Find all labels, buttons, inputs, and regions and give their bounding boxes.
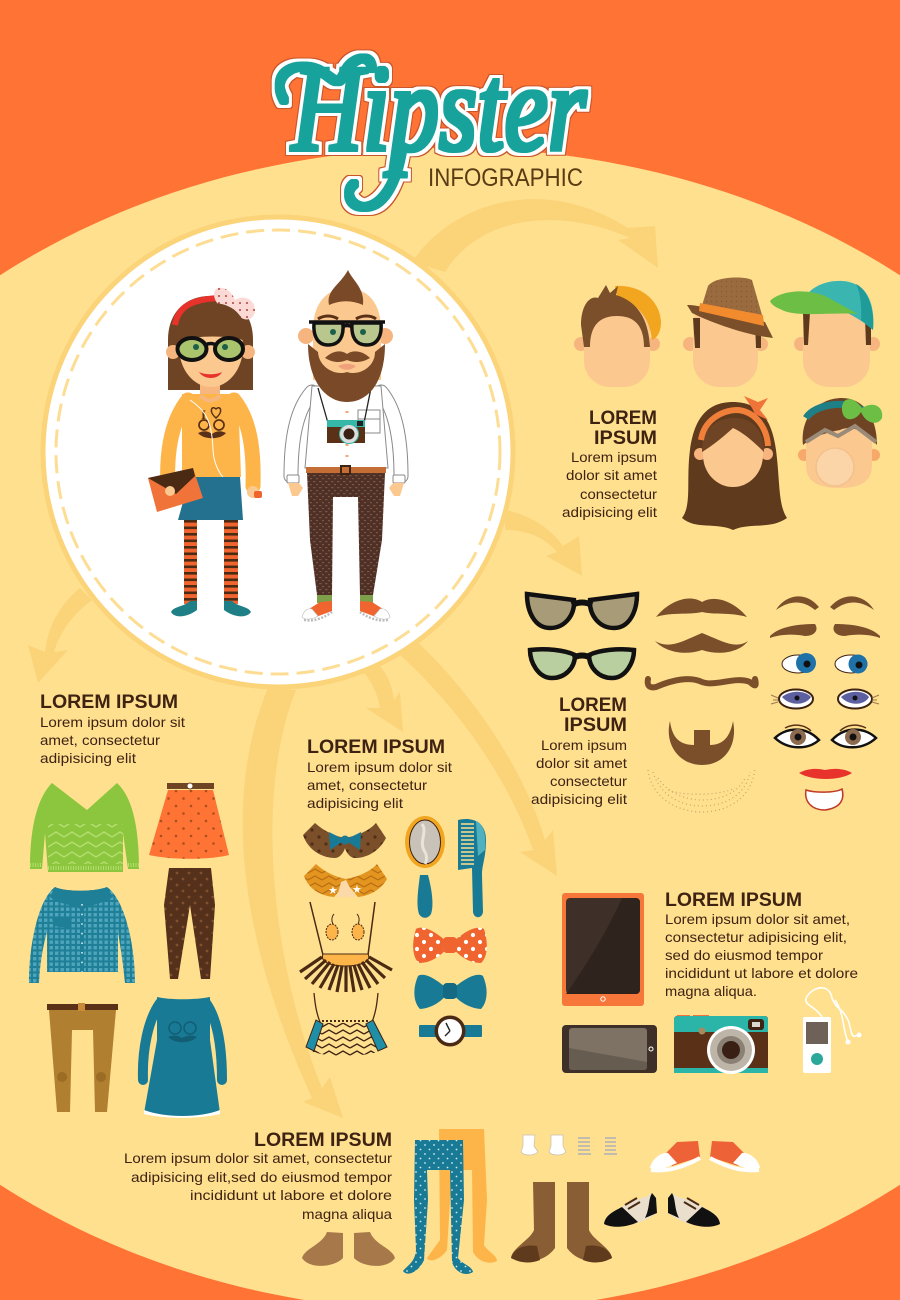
text: accessories: amet, consectetur bbox=[307, 777, 427, 793]
head: fedora hat bbox=[683, 278, 773, 387]
lips bbox=[799, 769, 852, 779]
text: footwear: LOREM IPSUM bbox=[254, 1130, 392, 1151]
teal dress bbox=[143, 997, 222, 1118]
orange skirt bbox=[149, 783, 229, 859]
teal tights bbox=[403, 1140, 473, 1274]
fringe necklace and earrings bbox=[300, 902, 392, 992]
ankle boots bbox=[302, 1232, 395, 1266]
text: facial features: consectetur bbox=[550, 773, 627, 789]
text: facial features: dolor sit amet bbox=[536, 755, 627, 771]
head: bubble gum girl bbox=[798, 398, 882, 488]
text: accessories: LOREM IPSUM bbox=[307, 737, 445, 758]
text: facial features: Lorem ipsum bbox=[541, 737, 627, 753]
title bbox=[280, 40, 587, 207]
text: gadgets: incididunt ut labore et dolore bbox=[665, 965, 858, 981]
text: accessories bbox=[307, 737, 452, 811]
mustache set bbox=[648, 598, 756, 687]
text: facial features bbox=[531, 695, 627, 807]
orange collar: ★ bbox=[328, 884, 338, 897]
text: heads: consectetur bbox=[580, 486, 657, 502]
comb bbox=[458, 819, 486, 917]
panel: clothing bbox=[29, 692, 229, 1118]
arrow: to heads bbox=[412, 199, 658, 272]
glasses: green lenses bbox=[530, 649, 634, 678]
beard bbox=[669, 721, 734, 765]
text: heads: LOREM bbox=[589, 408, 657, 429]
text: gadgets: sed do eiusmod tempor bbox=[665, 947, 823, 963]
panel: facial features bbox=[527, 594, 880, 812]
white socks bbox=[521, 1135, 566, 1155]
text: footwear: adipisicing elit,sed do eiusmod tempor bbox=[131, 1169, 392, 1185]
arrow: to accessories bbox=[362, 664, 403, 732]
orange collar bbox=[304, 864, 387, 897]
panel: gadgets bbox=[562, 890, 862, 1074]
title word bbox=[280, 40, 587, 207]
head: baseball cap bbox=[770, 281, 880, 387]
text: facial features: adipisicing elit bbox=[531, 791, 627, 807]
orange bow tie bbox=[413, 928, 487, 963]
text: footwear bbox=[124, 1130, 392, 1222]
text: heads: dolor sit amet bbox=[566, 467, 657, 483]
text: accessories: adipisicing elit bbox=[307, 795, 403, 811]
text: heads: adipisicing elit bbox=[562, 504, 657, 520]
wristwatch bbox=[419, 1016, 482, 1046]
brown collar bbox=[303, 823, 386, 858]
girl figure: I bbox=[201, 407, 206, 422]
head: quiff hair bbox=[574, 285, 661, 387]
teeth bbox=[806, 789, 843, 810]
denim shirt bbox=[29, 887, 135, 983]
green sweater bbox=[30, 783, 139, 872]
eyes: purple bbox=[771, 690, 879, 708]
text: gadgets bbox=[665, 890, 858, 999]
text: footwear: magna aliqua bbox=[302, 1206, 392, 1222]
panel: accessories bbox=[300, 737, 487, 1056]
hipster man figure bbox=[287, 270, 405, 620]
yellow tights bbox=[427, 1129, 497, 1263]
text: footwear: Lorem ipsum dolor sit amet, consectetur bbox=[124, 1150, 392, 1166]
text: clothing: amet, consectetur bbox=[40, 732, 160, 748]
glasses: dark lenses bbox=[527, 594, 637, 628]
text: gadgets: magna aliqua. bbox=[665, 983, 757, 999]
arrows bbox=[28, 199, 658, 1118]
text: clothing bbox=[40, 692, 185, 766]
zigzag necklace bbox=[306, 993, 387, 1056]
arrow: to clothing bbox=[28, 588, 92, 683]
retro camera bbox=[674, 1015, 768, 1074]
text: clothing: LOREM IPSUM bbox=[40, 692, 178, 713]
panel: heads and hair bbox=[562, 278, 882, 530]
orange sneakers bbox=[650, 1141, 760, 1170]
grey striped socks bbox=[578, 1138, 617, 1154]
smartphone bbox=[562, 1025, 657, 1073]
panel: footwear bbox=[124, 1129, 760, 1274]
text: gadgets: consectetur adipisicing elit, bbox=[665, 929, 847, 945]
text: facial features: IPSUM bbox=[564, 715, 627, 736]
hand mirror bbox=[405, 816, 445, 918]
text: gadgets: Lorem ipsum dolor sit amet, bbox=[665, 911, 850, 927]
arrow: to gadgets bbox=[400, 640, 557, 876]
dashed ring bbox=[56, 230, 500, 674]
text: clothing: Lorem ipsum dolor sit bbox=[40, 714, 185, 730]
head: long hair with bandana bbox=[682, 396, 787, 530]
tall brown boots bbox=[511, 1182, 612, 1262]
two-tone oxford shoes bbox=[604, 1193, 720, 1227]
eyebrows bbox=[770, 596, 880, 638]
text: accessories: Lorem ipsum dolor sit bbox=[307, 759, 452, 775]
text: footwear: incididunt ut labore et dolore bbox=[190, 1187, 392, 1203]
text: heads: Lorem ipsum bbox=[571, 449, 657, 465]
hipster couple circle bbox=[43, 217, 513, 687]
text: clothing: adipisicing elit bbox=[40, 750, 136, 766]
text: heads bbox=[562, 408, 657, 520]
title word: Hipster bbox=[290, 40, 587, 177]
blue bow tie bbox=[414, 975, 487, 1009]
brown trousers bbox=[164, 868, 215, 979]
music player with earphones bbox=[803, 988, 862, 1073]
text: facial features: LOREM bbox=[559, 695, 627, 716]
orange collar: ★ bbox=[352, 883, 362, 896]
eyes: brown bbox=[775, 725, 876, 747]
girl figure bbox=[148, 288, 262, 616]
arrow: to footwear bbox=[243, 688, 343, 1118]
khaki trousers bbox=[47, 1003, 118, 1112]
text: heads: IPSUM bbox=[594, 428, 657, 449]
title subtitle: INFOGRAPHIC bbox=[428, 164, 583, 192]
white circle bbox=[43, 217, 513, 687]
tablet bbox=[562, 893, 644, 1006]
eyes: blue bbox=[782, 653, 868, 674]
arrow: to face parts bbox=[505, 510, 582, 576]
stubble bbox=[648, 768, 755, 812]
text: gadgets: LOREM IPSUM bbox=[665, 890, 802, 911]
